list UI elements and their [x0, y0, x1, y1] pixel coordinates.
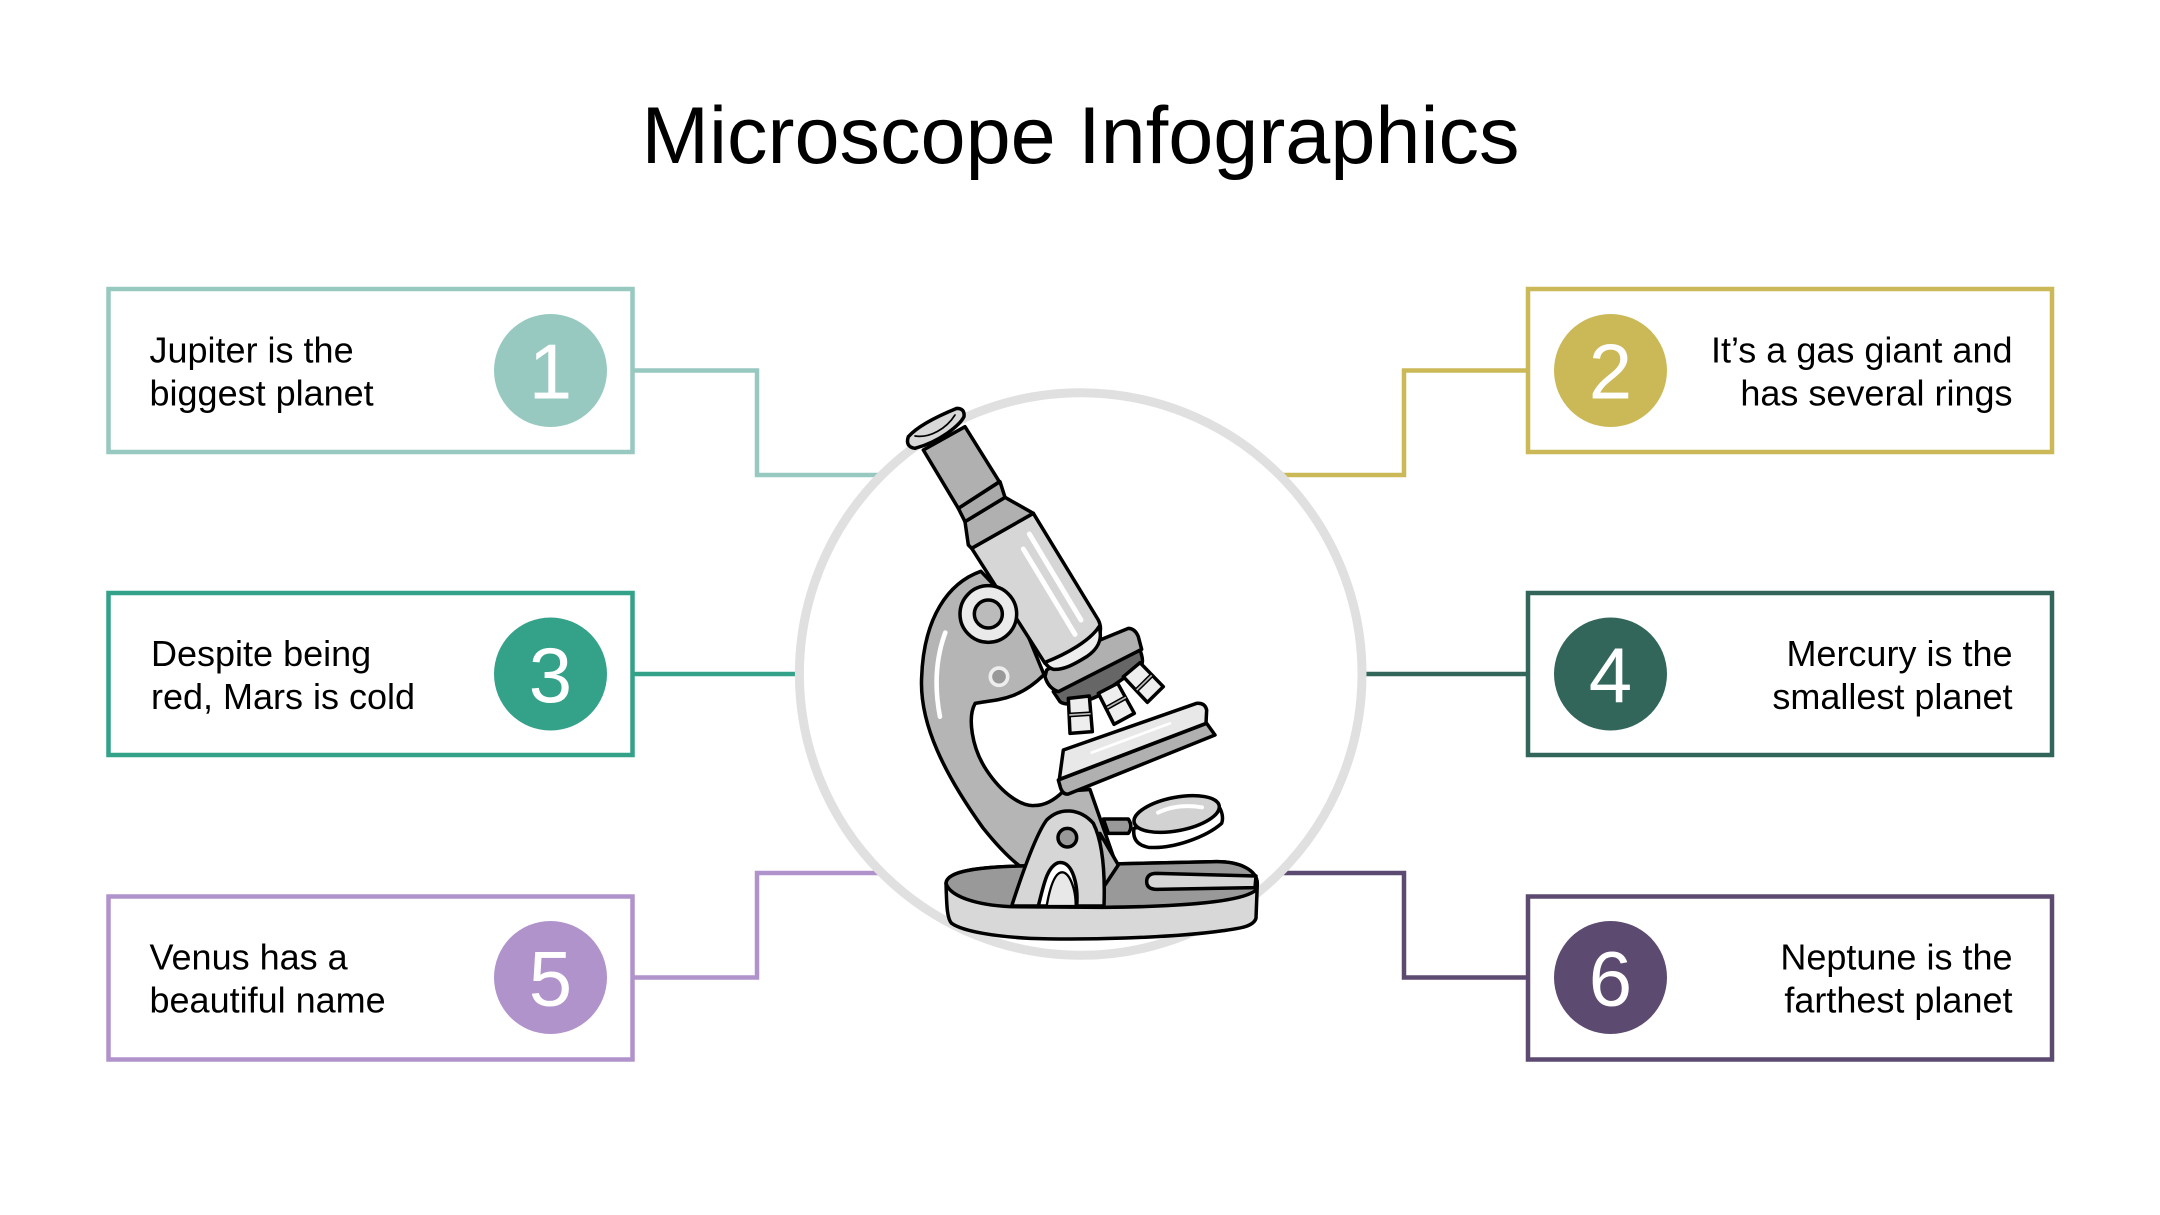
nosepiece top	[1045, 628, 1142, 692]
number badge 6: 6	[1589, 934, 1632, 1022]
title: Microscope Infographics	[642, 91, 1519, 181]
panel: 1 Jupiter	[108, 289, 632, 452]
number badge 4	[1554, 618, 1667, 730]
text: Jupiter: biggest planet	[150, 372, 374, 414]
text: Saturn: has several rings	[1740, 372, 2012, 414]
number badge 5	[494, 921, 607, 1034]
text: Neptune: farthest planet	[1784, 980, 2012, 1020]
stage	[1058, 703, 1215, 794]
number badge 6	[1554, 921, 1667, 1034]
text: Venus: beautiful name	[150, 980, 386, 1020]
connector 2	[1270, 370, 1528, 475]
eyepiece rim	[907, 408, 964, 448]
text: Jupiter: Jupiter is the	[150, 330, 354, 370]
text: Venus: Venus has a	[150, 936, 349, 978]
pillar	[1012, 811, 1104, 906]
nosepiece, objectives, stage and mirror	[1045, 628, 1223, 848]
panel: 2 Saturn	[1528, 289, 2052, 452]
connector 3	[633, 672, 800, 676]
nosepiece underside	[1053, 650, 1142, 704]
focus knob	[960, 586, 1017, 642]
text: Mars: Despite being	[151, 633, 371, 674]
icon: microscope	[907, 408, 1257, 939]
text: Saturn: It’s a gas giant and	[1711, 330, 2012, 370]
text: Mars: red, Mars is cold	[151, 676, 415, 717]
connector 5	[633, 873, 890, 978]
text: Mercury: Mercury is the	[1786, 633, 2012, 674]
number badge 5: 5	[529, 934, 572, 1022]
microscope arm	[921, 571, 1119, 889]
number badge 4: 4	[1589, 631, 1632, 719]
number badge 2	[1554, 314, 1667, 427]
central ring	[799, 393, 1362, 955]
connector 4	[1360, 672, 1528, 676]
arm highlight	[937, 633, 945, 717]
number badge 1	[494, 314, 607, 427]
text: Mercury: smallest planet	[1772, 676, 2012, 717]
text: Neptune: Neptune is the	[1780, 936, 2012, 978]
small knob	[990, 668, 1008, 685]
objectives	[1068, 663, 1163, 733]
panel: 5 Venus	[108, 896, 632, 1060]
mirror	[1103, 789, 1223, 848]
number badge 3: 3	[529, 631, 572, 719]
connector 6	[1270, 873, 1528, 978]
panel: 6 Neptune	[1528, 896, 2052, 1060]
body tube and eyepiece	[907, 408, 1100, 685]
panel: 4 Mercury	[1528, 593, 2052, 755]
connector 1	[633, 370, 890, 475]
number badge 2: 2	[1589, 328, 1632, 416]
base	[946, 833, 1257, 939]
number badge 1: 1	[529, 328, 572, 416]
panel: 3 Mars	[108, 593, 632, 755]
number badge 3	[494, 618, 607, 730]
